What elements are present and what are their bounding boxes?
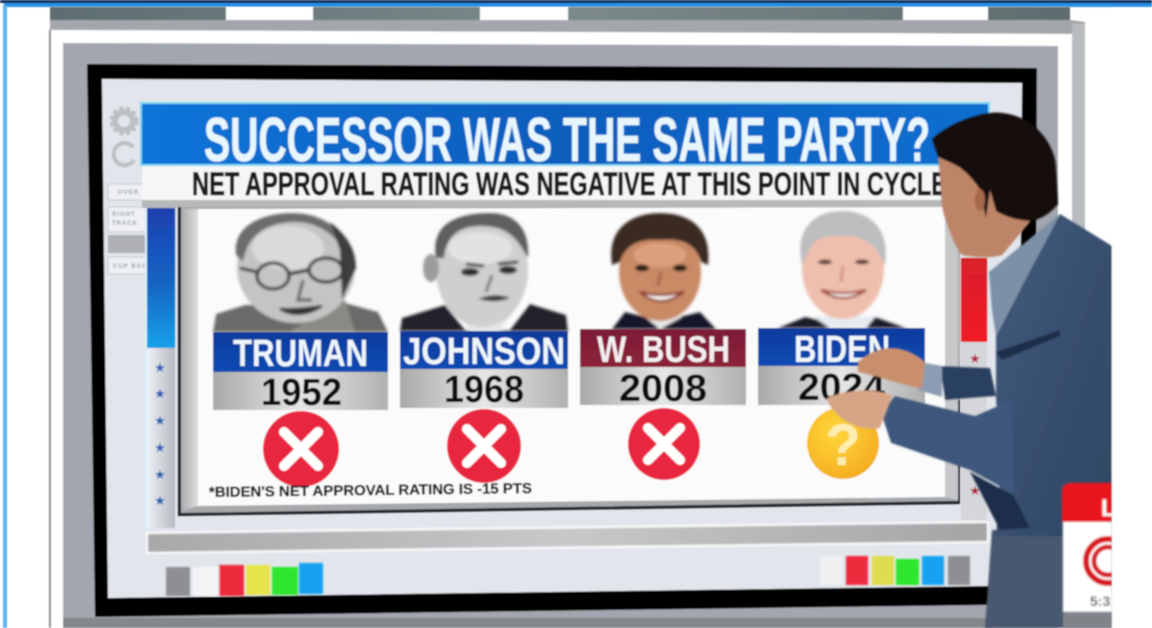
left blue bar with stars: ★	[154, 493, 166, 508]
right red bar with stars: ★	[969, 351, 981, 366]
candidate card: Truman: TRUMAN	[233, 333, 368, 375]
lapel shadow	[996, 330, 1060, 360]
candidate card: Johnson: JOHNSON	[403, 331, 565, 373]
right crop mask	[1112, 8, 1152, 628]
icon: red X Truman	[263, 411, 339, 487]
candidate card: Johnson: 1968	[444, 369, 524, 411]
portrait: Biden	[778, 211, 906, 328]
color swatches left	[166, 563, 323, 596]
portrait: W. Bush	[611, 213, 716, 329]
front arm sleeve	[881, 396, 1014, 494]
left tool icons	[111, 108, 137, 165]
side menu buttons: TRACK	[112, 221, 138, 227]
portrait: Truman	[213, 213, 388, 332]
shirt cuff back	[918, 362, 942, 397]
live tab	[1062, 483, 1112, 522]
side menu buttons	[108, 184, 160, 274]
candidate card: W. Bush: W. BUSH	[597, 329, 730, 370]
header banner	[141, 103, 989, 175]
left blue bar with stars: ★	[154, 467, 166, 482]
presenter	[826, 113, 1112, 628]
candidate card: W. Bush	[580, 329, 746, 410]
shirt collar	[989, 214, 1060, 336]
trousers	[985, 530, 1112, 628]
CNN logo	[1082, 534, 1113, 588]
candidate card: Truman: 1952	[261, 372, 342, 414]
icon: red X Johnson	[447, 409, 521, 483]
right red bar with stars	[961, 258, 987, 520]
subtitle strip	[142, 166, 988, 208]
clock: 5:3	[1090, 593, 1110, 609]
black screen bezel	[87, 64, 1037, 617]
CNN live bug	[1060, 481, 1113, 614]
side menu buttons: CUP BAG	[113, 264, 148, 270]
footnote: *BIDEN'S NET APPROVAL RATING IS -15 PTS	[209, 481, 532, 501]
left blue bar with stars: ★	[154, 386, 166, 401]
left blue bar with stars: ★	[154, 440, 166, 455]
candidate card: Johnson	[400, 331, 568, 411]
icon: gear	[111, 108, 137, 134]
left blue bar with stars: ★	[154, 413, 166, 428]
icon: yellow question mark Biden: ?	[825, 413, 861, 478]
portrait: Johnson	[400, 213, 568, 331]
side menu buttons: OVER	[118, 190, 139, 196]
white logo box	[1063, 522, 1112, 612]
color swatches right	[820, 556, 970, 585]
lower grey bar	[147, 522, 988, 553]
strip under CNN bug	[1063, 612, 1112, 628]
candidate card: Biden: 2024	[798, 367, 885, 409]
icon: refresh	[114, 143, 134, 165]
arm shadow	[970, 472, 1030, 530]
candidate card: Truman	[213, 332, 388, 414]
candidate card: Biden: BIDEN	[794, 329, 890, 371]
candidate card: W. Bush: 2008	[619, 368, 707, 410]
hand lower	[826, 390, 892, 429]
main content panel	[178, 207, 960, 516]
icon: yellow question mark Biden	[807, 407, 879, 479]
candidate card: Biden	[758, 328, 925, 409]
hair	[932, 113, 1058, 221]
left blue bar with stars	[145, 208, 175, 530]
icon: red X Bush	[628, 408, 700, 480]
CNN live bug: L	[1101, 495, 1116, 522]
back arm sleeve	[940, 366, 996, 400]
side menu buttons: RIGHT	[112, 212, 136, 218]
right red bar with stars: ★	[969, 483, 981, 498]
presenter jacket	[996, 214, 1112, 536]
ear	[975, 189, 985, 211]
neck and face	[938, 150, 1030, 257]
left blue bar with stars: ★	[154, 360, 166, 375]
screen surface	[102, 79, 1022, 598]
hand upper	[858, 348, 925, 388]
